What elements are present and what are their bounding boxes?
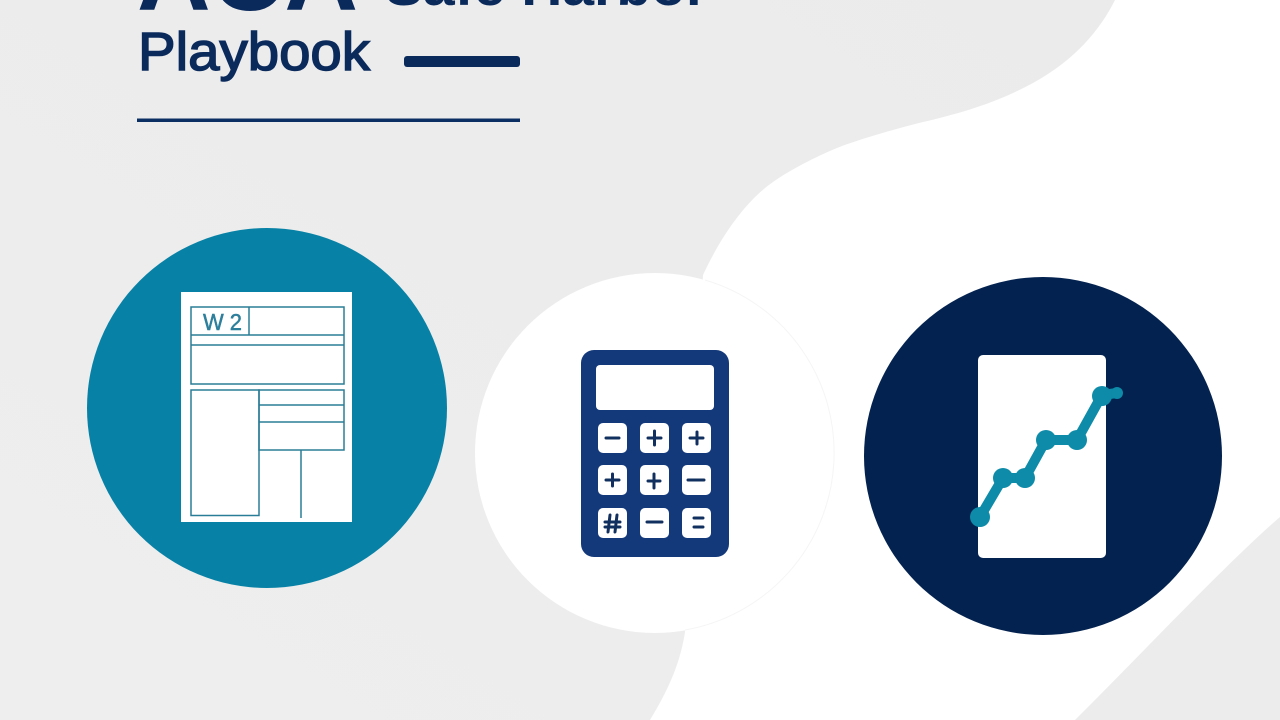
white circle (475, 273, 835, 633)
navy circle (864, 277, 1222, 635)
calculator key symbols (605, 431, 704, 532)
form label: W 2 (203, 309, 242, 335)
panel: calculator circle (475, 273, 835, 633)
panel: chart circle (864, 277, 1222, 635)
title (137, 0, 708, 82)
form field lines (191, 307, 344, 518)
title word: Playbook: Playbook (138, 22, 371, 82)
chart card (978, 355, 1106, 558)
calculator screen (596, 365, 714, 410)
calculator keys (598, 423, 711, 538)
background: grey corner (1075, 517, 1280, 720)
teal circle (87, 228, 447, 588)
circle faint edge (685, 280, 834, 630)
icon: chart card (970, 355, 1123, 558)
panel: W-2 form circle (87, 228, 447, 588)
calculator body (581, 350, 729, 557)
icon: W-2 form (181, 292, 352, 522)
icon: calculator (581, 350, 729, 557)
trend line (970, 386, 1123, 527)
title underline (137, 118, 520, 122)
title dash (404, 56, 520, 67)
form paper (181, 292, 352, 522)
